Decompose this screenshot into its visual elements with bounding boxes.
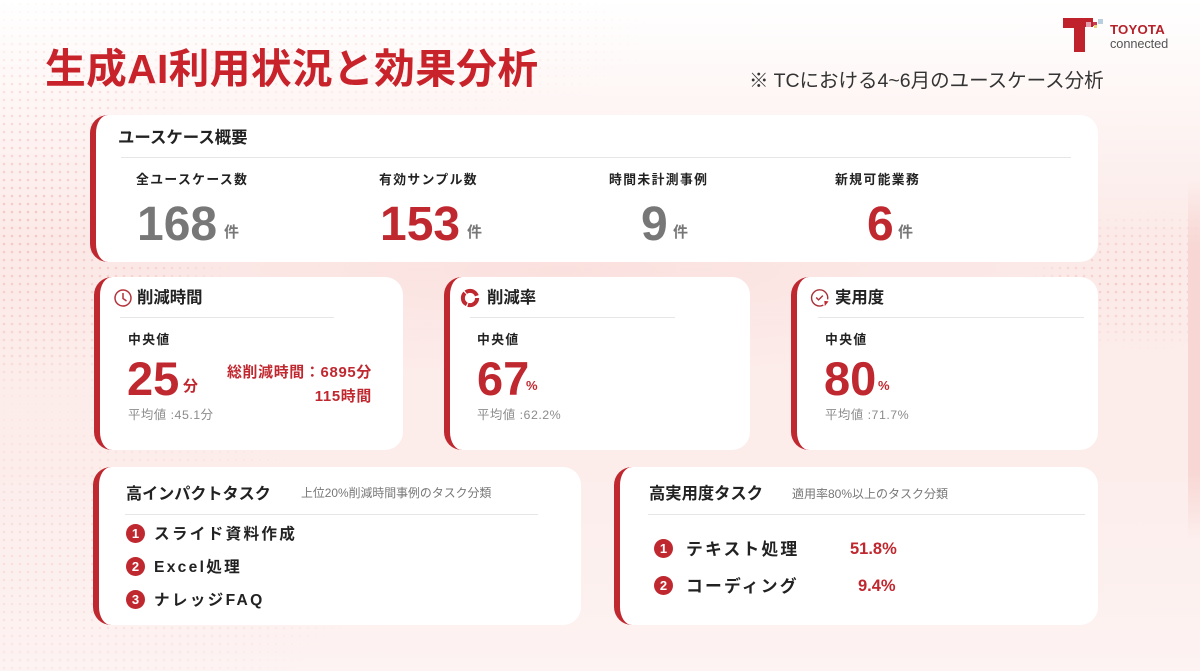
unit: % <box>878 378 890 393</box>
panel: practicality <box>791 277 1098 450</box>
logo wordmark top: TOYOTA <box>1110 22 1165 37</box>
value: 168 <box>137 198 217 251</box>
badge 1 <box>654 539 673 558</box>
panel: high practicality tasks <box>614 467 1098 625</box>
badge 2: 2 <box>660 578 667 593</box>
logo wordmark bottom: connected <box>1110 36 1168 51</box>
logo: Toyota Connected <box>1063 18 1168 52</box>
badge 3 <box>126 590 145 609</box>
average: 平均値 :71.7% <box>825 408 909 422</box>
label: 中央値 <box>825 332 868 347</box>
panel: use case overview <box>90 115 1098 262</box>
panel: high impact tasks <box>93 467 581 625</box>
subheading: 上位20%削減時間事例のタスク分類 <box>301 486 491 500</box>
value: 25 <box>127 352 179 405</box>
value: 9 <box>641 198 668 251</box>
unit: 件 <box>898 224 913 241</box>
unit: % <box>526 378 538 393</box>
badge 2 <box>654 576 673 595</box>
icon: T mark <box>1063 18 1103 52</box>
unit: 件 <box>224 224 239 241</box>
average: 平均値 :62.2% <box>477 408 561 422</box>
heading: 高インパクトタスク <box>126 485 271 503</box>
metric: total use cases <box>136 172 248 251</box>
list item 2 <box>654 576 896 596</box>
label: 新規可能業務 <box>835 172 920 187</box>
badge 1 <box>126 524 145 543</box>
icon: ring <box>460 288 480 308</box>
badge 1: 1 <box>132 526 139 541</box>
label: 有効サンプル数 <box>379 172 478 187</box>
heading: 削減率 <box>487 289 536 307</box>
heading: 高実用度タスク <box>649 485 763 503</box>
percentage: 9.4% <box>858 577 896 595</box>
list item 2 <box>126 557 242 576</box>
value: 67 <box>477 352 529 405</box>
label: 時間未計測事例 <box>609 172 708 187</box>
total time saved <box>227 364 372 405</box>
subtitle note: ※ TCにおける4~6月のユースケース分析 <box>749 70 1104 92</box>
list item 1 <box>654 539 897 559</box>
badge 2: 2 <box>132 559 139 574</box>
item text: スライド資料作成 <box>154 526 297 543</box>
value: 6 <box>867 198 894 251</box>
unit: 件 <box>673 224 688 241</box>
metric: newly possible tasks <box>835 172 920 251</box>
label: 中央値 <box>477 332 520 347</box>
item text: ナレッジFAQ <box>154 592 265 609</box>
heading: ユースケース概要 <box>118 129 248 147</box>
metric: time not measured <box>609 172 708 251</box>
total time saved: 115時間 <box>315 389 372 405</box>
item text: テキスト処理 <box>686 540 799 559</box>
badge 3: 3 <box>132 592 139 607</box>
heading: 削減時間 <box>137 289 203 307</box>
badge 2 <box>126 557 145 576</box>
list item 3 <box>126 590 265 609</box>
heading: 実用度 <box>835 289 884 307</box>
metric: valid samples <box>379 172 482 251</box>
icon: clock with check <box>810 289 828 307</box>
unit: 件 <box>467 224 482 241</box>
value: 153 <box>380 198 460 251</box>
badge 1: 1 <box>660 541 667 556</box>
total time saved: 総削減時間：6895分 <box>227 365 372 381</box>
panel: time saved <box>94 277 403 450</box>
title: 生成AI利用状況と効果分析 <box>45 46 538 92</box>
label: 全ユースケース数 <box>136 172 248 187</box>
subheading: 適用率80%以上のタスク分類 <box>792 487 948 501</box>
icon: clock <box>114 289 132 307</box>
value: 80 <box>824 352 876 405</box>
list item 1 <box>126 524 297 543</box>
item text: Excel処理 <box>154 559 242 576</box>
item text: コーディング <box>686 577 799 596</box>
label: 中央値 <box>128 332 171 347</box>
percentage: 51.8% <box>850 540 897 558</box>
panel: reduction rate <box>444 277 750 450</box>
average: 平均値 :45.1分 <box>128 408 214 422</box>
unit: 分 <box>183 378 198 395</box>
